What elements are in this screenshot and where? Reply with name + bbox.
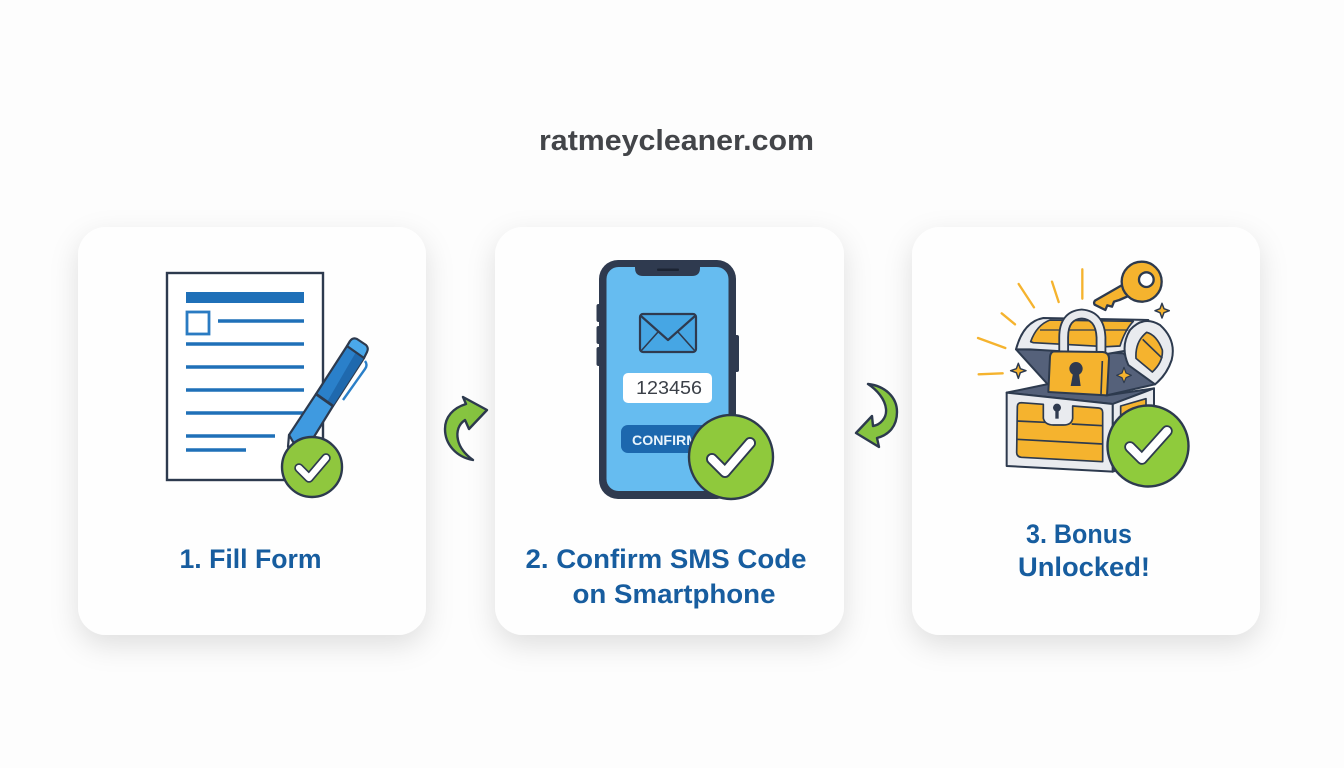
code box: 123456: [636, 377, 702, 398]
panel: step 3 bonus unlocked: [912, 227, 1260, 635]
title: ratmeycleaner.com: [539, 125, 814, 157]
icon: green check badge: [1108, 406, 1188, 486]
step 2 label: [526, 544, 806, 609]
chest front: [1007, 393, 1113, 472]
chest side: [1113, 388, 1154, 472]
arrow: step 1 to step 2: [445, 397, 487, 460]
step 3 label: 3. Bonus: [1026, 519, 1132, 549]
chest inner rim: [1007, 384, 1154, 404]
sparkles: [1011, 303, 1169, 378]
confirm button: CONFIRM: [632, 432, 698, 448]
icon: treasure chest with lock and key: [978, 262, 1173, 472]
icon: green check badge: [282, 437, 342, 497]
lid right end: [1125, 321, 1173, 384]
lid: [1016, 318, 1148, 354]
icon: pen: [288, 338, 368, 447]
panel: step 2 confirm sms code: [495, 227, 844, 635]
icon: green check badge: [689, 415, 773, 499]
rays: [978, 269, 1082, 374]
lid interior: [1016, 349, 1155, 395]
step 3 label: [1018, 519, 1150, 582]
sparkle on lid: [1117, 367, 1131, 383]
icon: envelope: [640, 314, 696, 352]
step 2 label: 2. Confirm SMS Code: [526, 544, 806, 574]
code box: [623, 373, 712, 403]
step 1 label: 1. Fill Form: [180, 544, 322, 574]
confirm button: [621, 425, 711, 453]
arrow: step 2 to step 3: [856, 384, 897, 447]
padlock: [1048, 314, 1109, 395]
panel: step 1 fill form: [78, 227, 426, 635]
step 2 label: on Smartphone: [572, 579, 776, 609]
step 3 label: Unlocked!: [1018, 552, 1150, 582]
icon: smartphone: [596, 260, 739, 499]
chest clasp keyhole: [1053, 404, 1061, 412]
key: [1094, 262, 1162, 310]
icon: form document with pen: [167, 273, 368, 497]
